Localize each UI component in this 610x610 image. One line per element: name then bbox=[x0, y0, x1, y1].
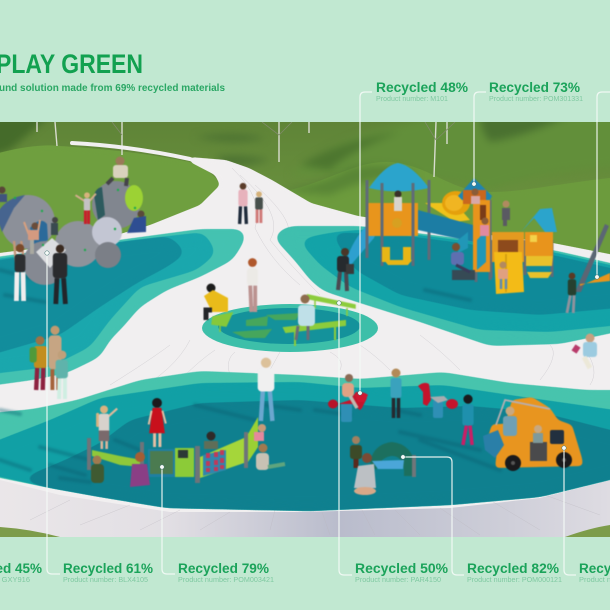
person: crouching adult right bbox=[574, 334, 597, 368]
person: child teal standing bbox=[390, 368, 402, 418]
tower house bbox=[458, 178, 492, 200]
label: recycled 61%: Recycled 61% bbox=[63, 561, 153, 576]
spring rider right bbox=[418, 383, 458, 418]
leader lines bbox=[47, 92, 610, 575]
label: recycled 45% bbox=[0, 561, 42, 584]
playground scene bbox=[0, 115, 610, 560]
label: recycled 61% bbox=[63, 561, 153, 584]
right house bbox=[521, 208, 557, 232]
label: recycled 79%: Product number: POM003421 bbox=[178, 575, 274, 584]
title: PLAY GREEN bbox=[0, 49, 143, 79]
blue ladder bbox=[458, 230, 486, 270]
blue slide left bbox=[347, 226, 375, 264]
person: girl teal magenta bbox=[462, 395, 474, 445]
person: child teal shirt bbox=[56, 350, 68, 399]
grass background bbox=[0, 122, 610, 254]
person: woman white top bbox=[247, 258, 258, 312]
left hill bbox=[0, 146, 219, 242]
seesaw arch bbox=[370, 442, 416, 477]
person: child on ladder bbox=[451, 243, 470, 272]
bench bottom bbox=[284, 321, 345, 346]
subtitle: und solution made from 69% recycled materials bbox=[0, 83, 225, 94]
person: child on slide bbox=[498, 262, 508, 289]
person: child dark green right bbox=[567, 273, 576, 313]
pavement narrow path top bbox=[70, 141, 193, 162]
teal circle centre bbox=[202, 304, 378, 352]
orange tower left bbox=[368, 203, 418, 236]
person: child white shirt bbox=[258, 358, 274, 421]
person: adult beige bbox=[48, 326, 62, 390]
person: child dark jacket bbox=[255, 191, 263, 223]
play structure bbox=[343, 163, 557, 294]
person: child behind panel bbox=[204, 432, 218, 449]
teal zone left bbox=[0, 229, 246, 390]
person: girl red dress bbox=[149, 398, 166, 447]
person: seated child plaid bbox=[130, 452, 150, 487]
posts bbox=[367, 180, 552, 282]
person: seated woman back bbox=[354, 453, 376, 495]
label: recycled 73%: Product number: POM301331 bbox=[489, 94, 583, 103]
person: seated yellow jacket bbox=[204, 284, 228, 320]
spring rider left bbox=[328, 392, 368, 422]
person: child on top of boulder bbox=[107, 156, 128, 186]
person: child far left bbox=[0, 186, 7, 202]
pavement lower shaded strip bbox=[0, 480, 610, 537]
right platform bbox=[526, 256, 553, 278]
pavement bbox=[0, 157, 610, 512]
person: children on tower bbox=[394, 188, 510, 236]
person: seated child blue bbox=[127, 210, 146, 233]
leader dots bbox=[45, 182, 599, 469]
person: woman arms up bbox=[14, 241, 25, 301]
label: recycled cut off at right bbox=[579, 561, 610, 584]
bench top bbox=[308, 295, 355, 316]
blue climbing bridge bbox=[418, 210, 473, 242]
label: recycled 82%: Recycled 82% bbox=[467, 561, 559, 576]
person: climbing child dark bbox=[51, 217, 58, 235]
yellow slide with frame bbox=[492, 232, 524, 262]
label: recycled 50% bbox=[355, 561, 448, 584]
label: recycled 82%: Product number: POM000121 bbox=[467, 575, 562, 584]
person: couple near slide bbox=[337, 248, 354, 291]
label: recycled 73%: Recycled 73% bbox=[489, 80, 580, 95]
person: boy camo bbox=[350, 436, 362, 468]
grass corners bbox=[0, 525, 610, 537]
person: climbing child bbox=[24, 220, 40, 254]
person: child red trousers bbox=[75, 192, 96, 224]
label: recycled 50%: Product number: PAR4150 bbox=[355, 575, 441, 584]
person: man black bbox=[53, 245, 67, 304]
pavement joint lines bbox=[30, 168, 600, 535]
bench left bbox=[212, 313, 232, 332]
yellow bases bbox=[382, 247, 412, 265]
label: recycled 48%: Product number: M101 bbox=[376, 94, 448, 103]
ground shadows bbox=[0, 270, 500, 482]
interactive panel bbox=[87, 417, 258, 483]
label: recycled 73% bbox=[489, 80, 583, 103]
person: man pale blue seated bbox=[296, 294, 315, 340]
person: child on spring rider bbox=[342, 374, 357, 408]
trees bbox=[37, 122, 455, 177]
car bbox=[483, 397, 583, 471]
label: recycled 79% bbox=[178, 561, 274, 584]
person: children in car bbox=[503, 406, 543, 443]
teal zone right bbox=[272, 226, 610, 346]
steps bbox=[452, 270, 475, 280]
person: child pink behind right panel bbox=[254, 424, 266, 441]
label: recycled 79%: Recycled 79% bbox=[178, 561, 269, 576]
label: recycled 82% bbox=[467, 561, 562, 584]
seesaw beam right bbox=[575, 224, 610, 292]
blue roof bbox=[369, 163, 429, 192]
person: seated child beige bbox=[256, 444, 285, 470]
label: recycled 48%: Recycled 48% bbox=[376, 80, 468, 95]
person: seated child floral bbox=[91, 456, 104, 483]
teal zone bottom bbox=[0, 371, 610, 511]
label: recycled 61%: Product number: BLX4105 bbox=[63, 575, 148, 584]
label: recycled 48% bbox=[376, 80, 468, 103]
person: man pink shirt bbox=[238, 183, 248, 224]
person: girl ponytail bbox=[96, 405, 117, 449]
yellow tube slide bbox=[425, 203, 470, 222]
climbing boulders bbox=[0, 181, 143, 285]
label: recycled 50%: Recycled 50% bbox=[355, 561, 448, 576]
person: boy with backpack bbox=[30, 336, 47, 390]
